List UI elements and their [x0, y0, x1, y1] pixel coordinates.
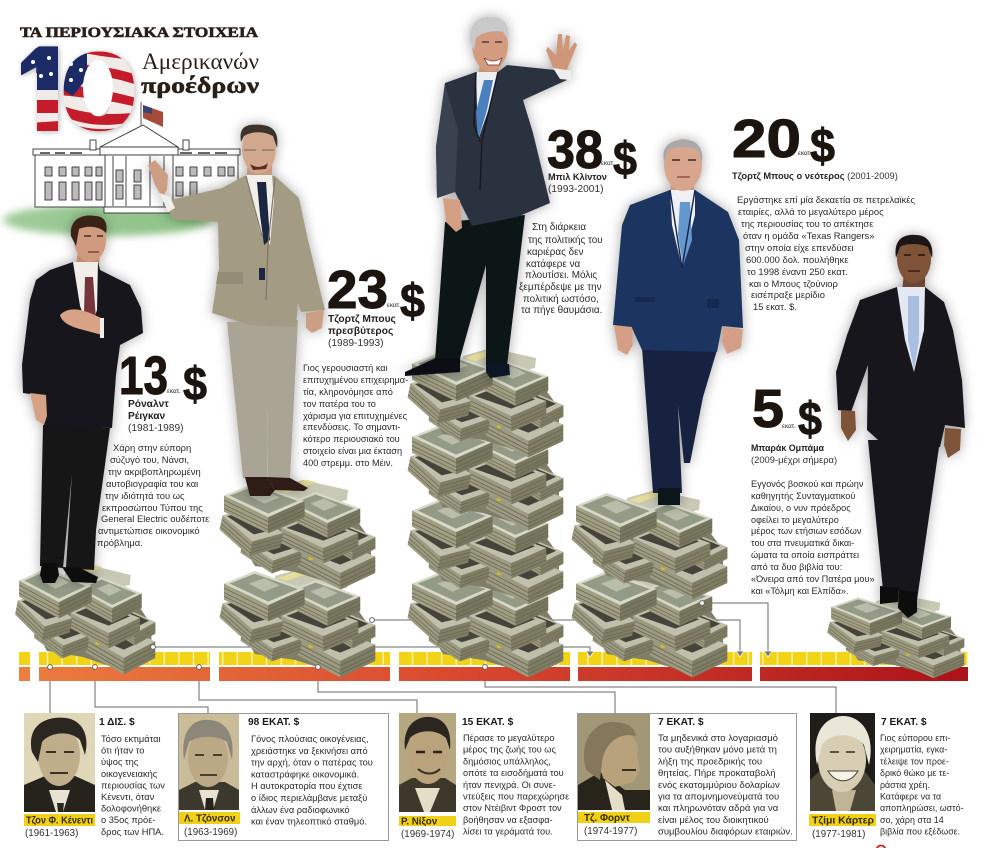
text: G. W. Bush: 600.000 δολ. πουλήθηκε — [746, 254, 849, 265]
text: Reagan: αντιμετώπισε οικονομικό — [98, 525, 200, 536]
amount: G. W. Bush 20 million — [732, 109, 835, 172]
text: Johnson: Η αυτοκρατορία που έχτισε — [251, 781, 363, 791]
money stack: G. W. Bush — [567, 490, 727, 678]
card: Carter: Τζίμι Κάρτερ — [812, 816, 874, 826]
amount: Reagan 13 million — [119, 346, 207, 410]
text: Obama: «Όνειρα από τον Πατέρα μου» — [751, 574, 875, 584]
card frame: Johnson — [178, 714, 388, 840]
name tag: Johnson — [179, 812, 240, 824]
text: Johnson: και έναν τηλεοπτικό σταθμό. — [251, 817, 367, 827]
name: Reagan: Ρέιγκαν — [128, 411, 165, 422]
card: Kennedy — [24, 713, 165, 839]
text: Ford: του αυξήθηκαν μόνο μετά τη — [658, 745, 777, 756]
green lawn — [3, 204, 213, 236]
text: Kennedy: ο 35ος πρόε- — [101, 815, 155, 825]
amount: G. W. Bush 20 million: εκατ. — [798, 150, 812, 157]
text: Reagan: την ιδιότητά του ως — [105, 490, 185, 501]
text: Kennedy: δρος των ΗΠΑ. — [101, 827, 164, 837]
text: Carter: Κατάφερε να τα — [880, 792, 941, 802]
text: Johnson: την αρχή, όταν ο πατέρας του — [251, 758, 373, 768]
amount: Reagan 13 million: εκατ. — [167, 388, 181, 395]
text: Obama: μέρος των ετήσιων εσόδων — [751, 526, 862, 536]
amount: Obama 5 million: $ — [798, 392, 822, 445]
icon: credit marker, cropped at bottom edge — [876, 846, 886, 848]
text: Bush senior: χάρισμα για επιτυχημένες — [303, 411, 408, 421]
text: Obama: Εγγονός βοσκού και πρώην — [751, 479, 864, 489]
text: Carter: αποπληρώσει, ωστό- — [880, 803, 964, 813]
text: Bush senior: 400 στρεμμ. στο Μέιν. — [303, 458, 393, 468]
text: Kennedy: περιουσίας των — [101, 780, 165, 790]
text: Carter: δρικό θώκο με τε- — [880, 768, 949, 778]
amount: Clinton 38 million: $ — [613, 132, 637, 185]
name: Clinton: Μπιλ Κλίντον — [548, 172, 607, 182]
card: Johnson: (1963-1969) — [184, 827, 237, 838]
card: Johnson: 98 ΕΚΑΤ. $ — [248, 717, 300, 728]
money stack: Bush senior — [215, 480, 375, 678]
card: Johnson: Λ. Τζόνσον — [184, 814, 236, 824]
text: Obama: ώματα τα οποία εισπράττει — [751, 550, 859, 560]
figure: George W. Bush — [613, 139, 743, 505]
card: Nixon: (1969-1974) — [401, 829, 454, 840]
text: Nixon: οπότε τα εισοδήματά του — [463, 768, 564, 778]
text: Clinton: της πολιτικής του — [528, 235, 603, 246]
figure: Ronald Reagan — [22, 216, 143, 583]
text: Nixon: ντεύξεις που παρεχώρησε — [463, 792, 569, 802]
text: G. W. Bush: της περιουσίας του το απέκτησε — [741, 218, 873, 229]
figure: Bill Clinton — [405, 17, 577, 378]
text: G. W. Bush: στην οποία είχε επενδύσει — [745, 242, 854, 253]
amount: Clinton 38 million: εκατ. — [601, 160, 615, 167]
portrait: Carter — [810, 713, 875, 811]
amount: G. W. Bush 20 million: 20 — [732, 109, 801, 169]
timeline bars — [19, 652, 968, 681]
subtitle: προέδρων — [141, 73, 259, 98]
amount: Bush senior 23 million: $ — [400, 274, 425, 327]
connector nodes and arrows — [48, 601, 772, 669]
text: Carter: βιβλία που εξέδωσε. — [880, 827, 960, 837]
text: Bush senior: Γιος γερουσιαστή και — [303, 363, 388, 373]
text: Nixon: βοήθησαν να εξασφα- — [463, 815, 553, 825]
figure: George Bush senior — [148, 124, 325, 496]
text: Reagan: αυτοβιογραφία του και — [106, 478, 198, 489]
amount: Reagan 13 million: 13 — [119, 346, 168, 406]
amount: Clinton 38 million — [547, 120, 637, 185]
name: Bush senior: πρεσβύτερος — [328, 326, 393, 337]
name: G. W. Bush: (2001-2009) — [845, 171, 898, 181]
text: Reagan: πρόβλημα. — [97, 537, 143, 548]
text: Kennedy: ύψος της — [101, 757, 139, 767]
card: Nixon: Ρ. Νίξον — [401, 816, 438, 828]
title line: ΤΑ ΠΕΡΙΟΥΣΙΑΚΑ ΣΤΟΙΧΕΙΑ — [20, 25, 259, 41]
text: Nixon: λίσει τα γεράματά του. — [463, 827, 553, 837]
text: Reagan: εκπροσώπου Τύπου της — [102, 502, 203, 513]
text: Reagan: σύζυγό του, Νάνσι, — [110, 454, 189, 465]
text: Kennedy: οικογενειακής — [101, 769, 158, 779]
text: Nixon: δημόσιος υπάλληλος, — [463, 756, 551, 766]
name tag: Kennedy — [24, 814, 95, 826]
text: G. W. Bush: και ο Μπους τζούνιορ — [749, 278, 838, 289]
name: G. W. Bush: Τζορτζ Μπους ο νεότερος — [732, 171, 845, 181]
text: Bush senior: στοιχείο είναι μια έκταση — [303, 446, 402, 456]
text: Bush senior: κότερο περιουσιακό του — [303, 434, 400, 444]
amount: Bush senior 23 million: εκατ. — [387, 302, 401, 309]
name: Clinton: (1993-2001) — [548, 184, 604, 195]
connector lines — [50, 603, 836, 713]
text: Ford: είναι μέλος του διοικητικού — [658, 815, 769, 826]
amount: Clinton 38 million: 38 — [547, 120, 603, 180]
text: Johnson: χρειάστηκε να ξεκινήσει από — [251, 746, 368, 756]
text: Ford: λήξη της προεδρικής του — [658, 756, 762, 767]
illustration: White House — [33, 125, 240, 213]
card: Nixon: 15 ΕΚΑΤ. $ — [462, 717, 514, 728]
text: Obama: οφείλει το μεγαλύτερο — [751, 515, 839, 525]
figure: Barack Obama — [836, 235, 965, 618]
amount: G. W. Bush 20 million: $ — [810, 119, 835, 172]
text: Ford: και πληρωνόταν αδρά για να — [658, 803, 779, 814]
subtitle: Αμερικανών — [142, 49, 259, 74]
card: Kennedy: (1961-1963) — [25, 828, 78, 839]
name tag: Carter — [809, 814, 876, 826]
card: Ford: 7 ΕΚΑΤ. $ — [658, 717, 704, 728]
text: Ford: ενός εκατομμύριου δολαρίων — [658, 780, 780, 791]
text: Kennedy: Κένεντι, όταν — [101, 792, 155, 802]
text: Kennedy: δολοφονήθηκε — [101, 804, 161, 814]
card: Kennedy: Τζον Φ. Κένεντι — [26, 816, 93, 826]
card: Nixon — [399, 713, 569, 840]
text: Clinton: πολιτική ωστόσο, — [523, 294, 599, 305]
text: Carter: Γιος εύπορου επι- — [880, 733, 950, 743]
text: Johnson: Γόνος πλούσιας οικογένειας, — [251, 734, 369, 744]
text: Nixon: ήταν πενιχρά. Οι συνε- — [463, 780, 556, 790]
card frame: Ford — [578, 714, 796, 840]
text: Reagan: General Electric ουδέποτε — [101, 513, 209, 524]
text: Nixon: Πέρασε το μεγαλύτερο — [463, 733, 555, 743]
name: Obama: (2009-μέχρι σήμερα) — [751, 454, 837, 465]
text: Johnson: ο ίδιος περιελάμβανε μεταξύ — [251, 793, 367, 803]
name: Obama: Μπαράκ Ομπάμα — [751, 443, 825, 453]
text: Obama: από τα δυο βιβλία του: — [751, 562, 842, 572]
text: G. W. Bush: 15 εκατ. $. — [753, 301, 797, 312]
text: Obama: Δικαίου, ο νυν πρόεδρος — [751, 503, 851, 513]
portrait: Johnson — [179, 714, 239, 810]
name tag: Ford — [578, 812, 650, 823]
name: Reagan: (1981-1989) — [128, 423, 184, 434]
text: Reagan: Χάρη στην εύπορη — [113, 442, 191, 453]
text: Bush senior: τον πατέρα του το — [303, 399, 376, 409]
text: Carter: τέλειψε τον προε- — [880, 756, 949, 766]
illustration: flag on White House — [141, 102, 163, 127]
flag-filled number 10: 1 — [8, 24, 82, 156]
text: Ford: Τα μηδενικά στο λογαριασμό — [658, 733, 778, 744]
card: Carter: 7 ΕΚΑΤ. $ — [881, 717, 927, 728]
text: Nixon: μέρος της ζωής του ως — [463, 745, 556, 755]
portrait: Ford — [578, 714, 650, 810]
text: Ford: συμβουλίου διαφόρων εταιριών. — [658, 827, 793, 838]
text: Bush senior: επενδύσεις. Το σημαντι- — [303, 422, 400, 432]
text: G. W. Bush: όταν η ομάδα «Texas Rangers» — [743, 230, 874, 241]
amount: Obama 5 million — [752, 379, 822, 445]
name: Bush senior: Τζορτζ Μπους — [328, 314, 396, 325]
money stack: Clinton — [403, 348, 563, 678]
text: Clinton: Στη διάρκεια — [532, 222, 586, 233]
text: Carter: σο, χάρη στα 14 — [880, 815, 944, 825]
amount: Reagan 13 million: $ — [183, 357, 207, 410]
card: Johnson — [178, 714, 388, 840]
amount: Bush senior 23 million: 23 — [327, 260, 388, 320]
text: Bush senior: επιτυχημένου επιχειρημα- — [303, 375, 408, 385]
text: Kennedy: ότι ήταν το — [101, 746, 144, 756]
text: Ford: θητείας. Πήρε προκαταβολή — [658, 768, 776, 779]
text: Kennedy: Τόσο εκτιμάται — [101, 734, 161, 744]
card: Ford: (1974-1977) — [584, 826, 637, 837]
card: Carter: (1977-1981) — [812, 829, 865, 840]
text: Obama: του στα πνευματικά δικαι- — [751, 538, 854, 548]
text: Obama: καθηγητής Συνταγματικού — [751, 491, 855, 501]
card: Ford — [578, 714, 796, 840]
text: G. W. Bush: Εργάστηκε επί μία δεκαετία σε πετρελαϊκές — [737, 194, 915, 205]
card: Ford: Τζ. Φορντ — [584, 813, 630, 824]
money stack: Obama — [824, 595, 964, 678]
text: Clinton: πλουτίσει. Μόλις — [525, 270, 597, 281]
text: Carter: χειρηματία, εγκα- — [880, 745, 947, 755]
text: Obama: και «Τόλμη και Ελπίδα». — [751, 586, 848, 596]
text: Nixon: στον Ντέιβιντ Φροστ τον — [463, 803, 562, 813]
text: G. W. Bush: εισέπραξε μερίδιο — [751, 289, 825, 300]
amount: Bush senior 23 million — [327, 260, 425, 327]
text: Johnson: άλλων ένα ραδιοφωνικό — [251, 805, 350, 815]
name: Reagan: Ρόναλντ — [128, 399, 169, 410]
name: Bush senior: (1989-1993) — [328, 338, 384, 349]
card: Kennedy: 1 ΔΙΣ. $ — [99, 717, 135, 728]
text: G. W. Bush: εταιρίες, αλλά το μεγαλύτερο μέρος — [738, 206, 884, 217]
name tag: Nixon — [399, 816, 456, 826]
card: Carter — [809, 713, 964, 840]
text: Ford: για τα απομνημονεύματά του — [658, 792, 779, 802]
text: Bush senior: τία, κληρονόμησε από — [303, 387, 393, 397]
subtitle — [141, 49, 259, 98]
text: Clinton: τα πήγε θαυμάσια. — [521, 305, 602, 316]
text: Reagan: την ακριβοπληρωμένη — [108, 466, 201, 477]
portrait: Kennedy — [24, 713, 95, 812]
text: G. W. Bush: το 1998 έναντι 250 εκατ. — [747, 266, 848, 277]
amount: Obama 5 million: εκατ. — [782, 423, 796, 430]
text: Carter: ράστια χρέη. — [880, 780, 930, 790]
flag-filled number 10 — [18, 44, 138, 136]
flag-filled number 10: 0 — [59, 34, 139, 154]
text: Clinton: κατάφερε να — [526, 259, 581, 270]
text: Clinton: καριέρας δεν — [527, 247, 583, 258]
text: Johnson: καταστράφηκε οικονομικά. — [251, 769, 359, 779]
money stack: Reagan — [11, 565, 155, 675]
amount: Obama 5 million: 5 — [752, 379, 784, 439]
portrait: Nixon — [399, 713, 456, 812]
text: Clinton: ξεμπέρδεψε με την — [519, 282, 602, 293]
